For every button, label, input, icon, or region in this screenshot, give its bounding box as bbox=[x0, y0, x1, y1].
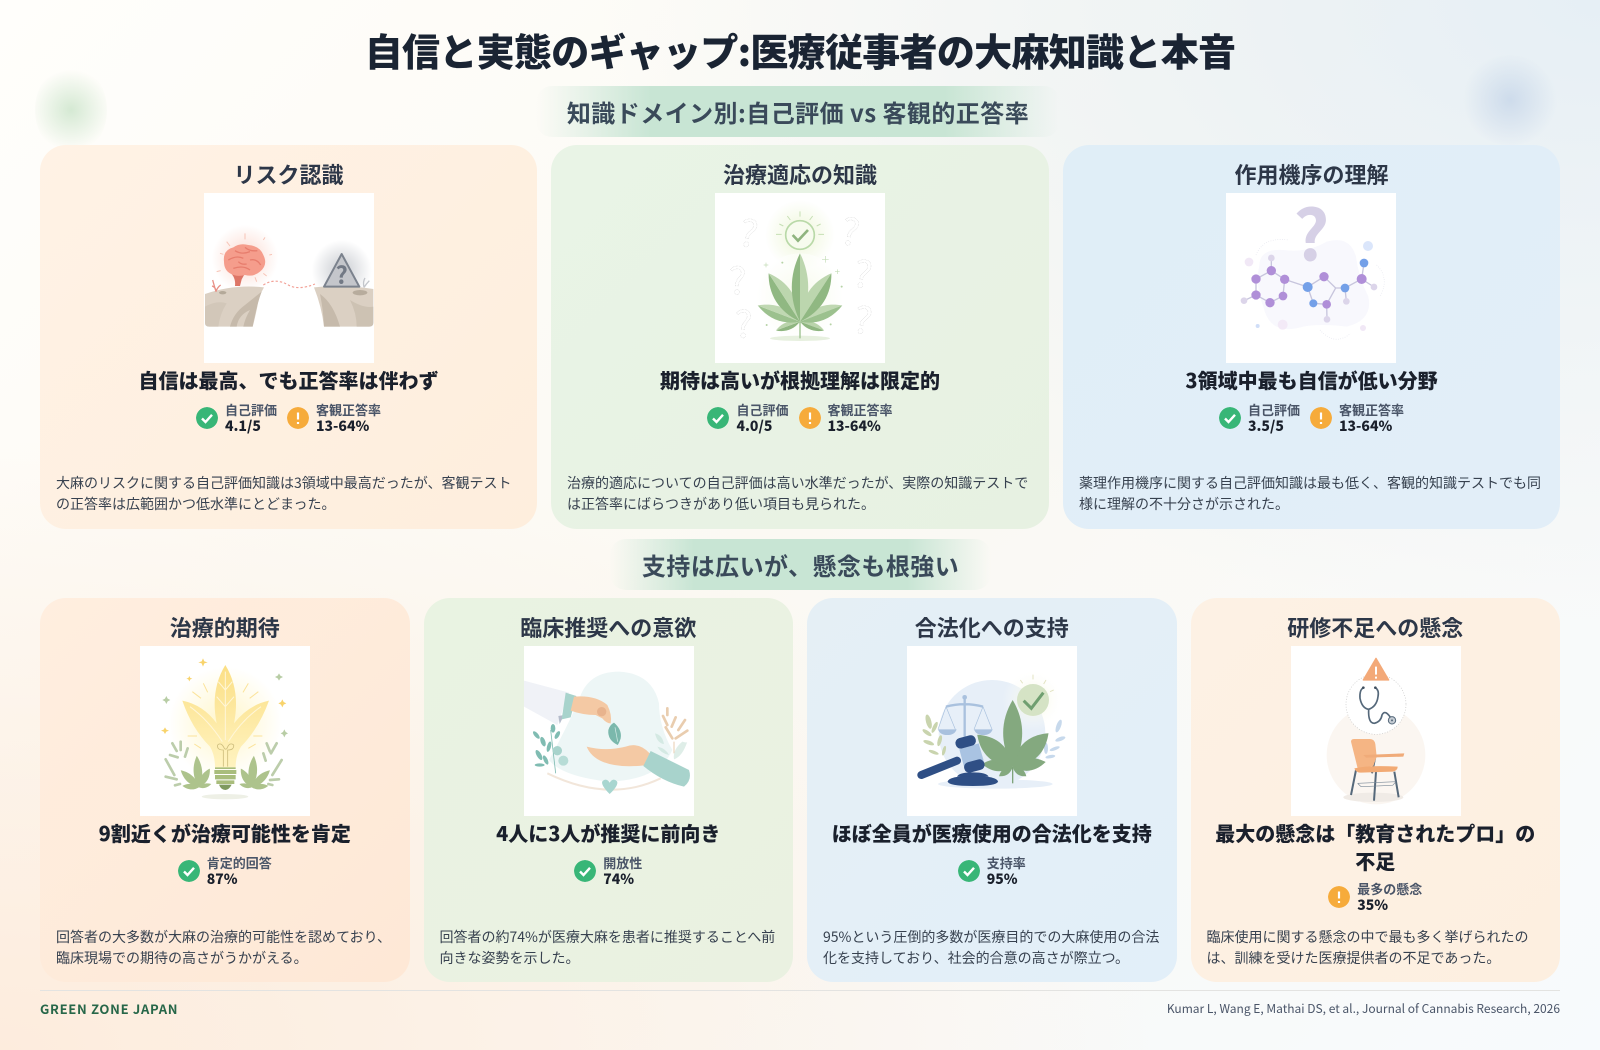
stat: self rating: 自己評価 bbox=[736, 400, 788, 419]
stat: top concern bbox=[1328, 879, 1422, 915]
body text bbox=[1079, 473, 1541, 514]
stat: support rate: 95% bbox=[987, 869, 1018, 889]
section heading: knowledge domains: 知識ドメイン別:自己評価 vs 客観的正答率 bbox=[567, 94, 1029, 129]
illustration: gavel, scales and leaf bbox=[907, 646, 1077, 816]
body text: 向きな姿勢を示した。 bbox=[440, 948, 580, 968]
body text bbox=[823, 927, 1159, 968]
body text: 95%という圧倒的多数が医療目的での大麻使用の合法 bbox=[823, 927, 1159, 947]
stat: self rating: 自己評価 bbox=[225, 400, 277, 419]
illustration: hands passing a leaf bbox=[524, 646, 694, 816]
key finding: 最大の懸念は「教育されたプロ」の bbox=[1215, 818, 1535, 847]
illustration: brain and warning across a cliff gap: ? bbox=[335, 255, 348, 290]
panel: therapeutic expectation bbox=[40, 598, 410, 982]
body text bbox=[567, 473, 1028, 514]
illustration: cannabis leaf with check and question marks: ? bbox=[850, 243, 877, 300]
illustration: cannabis leaf with check and question marks: ? bbox=[838, 201, 864, 257]
illustration: cannabis leaf with check and question marks: ? bbox=[729, 251, 746, 305]
card heading: 治療適応の知識 bbox=[723, 158, 877, 190]
decorative glow: green bbox=[35, 65, 107, 155]
illustration: cannabis leaf with check and question marks: ? bbox=[850, 289, 877, 346]
stat: objective correct rate: 13-64% bbox=[1339, 416, 1392, 436]
stat: self rating: 3.5/5 bbox=[1248, 416, 1284, 436]
stat: objective correct rate: 13-64% bbox=[316, 416, 369, 436]
footer citation: Kumar L, Wang E, Mathai DS, et al., Journal of Cannabis Research, 2026 bbox=[1167, 1000, 1560, 1017]
decorative glow: blue bbox=[1460, 55, 1560, 145]
statistics bbox=[707, 400, 893, 436]
stat: self rating: 4.1/5 bbox=[225, 416, 261, 436]
panel: risk awareness bbox=[40, 145, 537, 529]
key finding: 9割近くが治療可能性を肯定 bbox=[99, 818, 351, 847]
body text: 治療的適応についての自己評価は高い水準だったが、実際の知識テストで bbox=[567, 473, 1028, 493]
stat: top concern: 最多の懸念 bbox=[1357, 879, 1422, 898]
section heading: knowledge domains bbox=[536, 86, 1060, 137]
stat: objective correct rate: 客観正答率 bbox=[1339, 400, 1404, 419]
body text: 大麻のリスクに関する自己評価知識は3領域中最高だったが、客観テスト bbox=[56, 473, 512, 493]
stat: objective correct rate: 客観正答率 bbox=[828, 400, 893, 419]
stat: self rating: 4.0/5 bbox=[736, 416, 772, 436]
statistics bbox=[178, 853, 272, 889]
key finding: 期待は高いが根拠理解は限定的 bbox=[660, 365, 940, 394]
body text bbox=[1206, 927, 1528, 968]
key finding: 4人に3人が推奨に前向き bbox=[496, 818, 720, 847]
body text: 臨床使用に関する懸念の中で最も多く挙げられたの bbox=[1206, 927, 1528, 947]
stat: openness: 開放性 bbox=[603, 853, 642, 872]
footer brand: GREEN ZONE JAPAN bbox=[40, 999, 178, 1018]
panel: treatment indication knowledge bbox=[551, 145, 1049, 529]
card heading: 作用機序の理解 bbox=[1234, 158, 1388, 190]
stat: support rate bbox=[958, 853, 1026, 889]
illustration: molecule with question mark bbox=[1226, 193, 1396, 363]
stat: objective correct rate bbox=[287, 400, 381, 436]
card heading: 治療的期待 bbox=[170, 611, 280, 643]
body text: は、訓練を受けた医療提供者の不足であった。 bbox=[1206, 948, 1500, 968]
key finding bbox=[1215, 818, 1535, 875]
illustration: cannabis leaf with check and question marks: ? bbox=[735, 294, 752, 348]
body text: 回答者の約74%が医療大麻を患者に推奨することへ前 bbox=[440, 927, 775, 947]
panel: mechanism of action bbox=[1063, 145, 1560, 529]
stat: openness: 74% bbox=[603, 869, 634, 889]
statistics bbox=[958, 853, 1026, 889]
illustration: cannabis leaf with check and question marks bbox=[715, 193, 885, 363]
statistics bbox=[196, 400, 381, 436]
stat: objective correct rate bbox=[1310, 400, 1404, 436]
stat: self rating bbox=[1219, 400, 1300, 436]
stat: affirmative answers: 87% bbox=[207, 869, 238, 889]
body text: 臨床現場での期待の高さがうかがえる。 bbox=[56, 948, 308, 968]
body text: 回答者の大多数が大麻の治療的可能性を認めており、 bbox=[56, 927, 391, 947]
card heading: リスク認識 bbox=[233, 158, 344, 190]
section heading: support and concerns bbox=[610, 539, 991, 590]
stat: objective correct rate bbox=[799, 400, 893, 436]
card heading: 臨床推奨への意欲 bbox=[520, 611, 696, 643]
body text: は正答率にばらつきがあり低い項目も見られた。 bbox=[567, 494, 875, 514]
statistics bbox=[1328, 879, 1422, 915]
card heading: 合法化への支持 bbox=[915, 611, 1069, 643]
body text: 化を支持しており、社会的合意の高さが際立つ。 bbox=[823, 948, 1129, 968]
statistics bbox=[1219, 400, 1404, 436]
key finding: 自信は最高、でも正答率は伴わず bbox=[138, 365, 438, 394]
stat: objective correct rate: 13-64% bbox=[828, 416, 881, 436]
statistics bbox=[574, 853, 642, 889]
key finding: 不足 bbox=[1355, 846, 1395, 875]
body text: 薬理作用機序に関する自己評価知識は最も低く、客観的知識テストでも同 bbox=[1079, 473, 1541, 493]
key finding: ほぼ全員が医療使用の合法化を支持 bbox=[832, 818, 1152, 847]
panel: lack of training bbox=[1190, 598, 1560, 982]
stat: affirmative answers: 肯定的回答 bbox=[207, 853, 272, 872]
stat: self rating: 自己評価 bbox=[1248, 400, 1300, 419]
stat: affirmative answers bbox=[178, 853, 272, 889]
stat: objective correct rate: 客観正答率 bbox=[316, 400, 381, 419]
stat: top concern: 35% bbox=[1357, 895, 1388, 915]
panel: support for legalization bbox=[807, 598, 1176, 982]
stat: self rating bbox=[707, 400, 788, 436]
illustration: stethoscope, warning and school chair bbox=[1290, 646, 1460, 816]
section heading: support and concerns: 支持は広いが、懸念も根強い bbox=[642, 547, 959, 582]
illustration: leaf-shaped light bulb bbox=[140, 646, 310, 816]
card heading: 研修不足への懸念 bbox=[1287, 611, 1463, 643]
body text: 様に理解の不十分さが示された。 bbox=[1079, 494, 1289, 514]
body text bbox=[56, 473, 512, 514]
illustration: cannabis leaf with check and question marks: ? bbox=[736, 203, 762, 259]
illustration: brain and warning across a cliff gap bbox=[204, 193, 374, 363]
body text bbox=[56, 927, 391, 968]
panel: willingness to recommend bbox=[424, 598, 793, 982]
stat: support rate: 支持率 bbox=[987, 853, 1026, 872]
key finding: 3領域中最も自信が低い分野 bbox=[1185, 365, 1438, 394]
body text: の正答率は広範囲かつ低水準にとどまった。 bbox=[56, 494, 335, 514]
stat: openness bbox=[574, 853, 642, 889]
body text bbox=[440, 927, 775, 968]
title: 自信と実態のギャップ:医療従事者の大麻知識と本音 bbox=[365, 22, 1235, 77]
stat: self rating bbox=[196, 400, 277, 436]
